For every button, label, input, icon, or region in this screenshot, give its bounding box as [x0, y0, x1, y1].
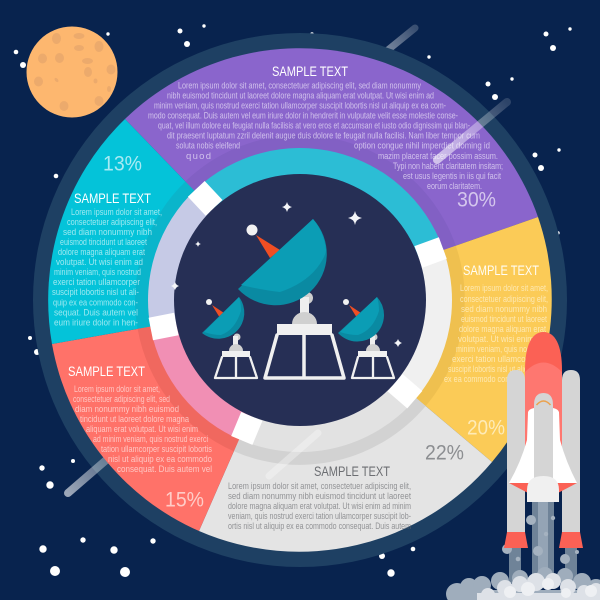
- text: purple sector: dit praesent luptatum zzril delenit augue duis dolore te feugait nulla facilisi. Nam liber tempor cum: [167, 130, 480, 142]
- text: coral sector: aliquam erat volutpat. Ut wisi enim: [86, 424, 198, 435]
- text: coral sector: tincidunt ut laoreet dolore magna: [80, 414, 190, 425]
- text: cyan sector: exerci tation ullamcorper: [53, 277, 140, 288]
- outer ring: [33, 33, 567, 567]
- text: grey sector: 22%: [425, 442, 464, 464]
- text: cyan sector: SAMPLE TEXT: [74, 190, 151, 206]
- text: purple sector: SAMPLE TEXT: [272, 63, 348, 79]
- text: yellow sector: consectetuer adipiscing elit,: [460, 294, 548, 305]
- text: coral sector: consequat. Duis autem vel: [117, 464, 212, 475]
- text: yellow sector: suscipit lobortis nisl ut aliquip: [448, 364, 537, 375]
- text: coral sector: tation ullamcorper suscipit lobortis: [101, 444, 212, 455]
- text: purple sector: mazim placerat facer possim assum.: [378, 151, 498, 162]
- panel: yellow sector 20%: [300, 217, 552, 462]
- meteor: lower left: [68, 455, 112, 493]
- panel: cyan sector 13%: [48, 119, 300, 344]
- text: cyan sector: quip ex ea commodo con-: [53, 298, 138, 308]
- text: coral sector: 15%: [165, 488, 204, 512]
- text: grey sector: [228, 442, 464, 532]
- text: grey sector: SAMPLE TEXT: [314, 463, 390, 479]
- sparkle stars: [171, 202, 402, 347]
- text: coral sector: SAMPLE TEXT: [68, 363, 145, 379]
- text: yellow sector: sed diam nonummy nibh: [461, 304, 547, 315]
- text: purple sector: quod: [186, 151, 211, 162]
- text: coral sector: Lorem ipsum dolor sit amet,: [74, 384, 160, 395]
- text: yellow sector: Lorem ipsum dolor sit amet,: [460, 283, 548, 294]
- text: yellow sector: euismod tincidunt ut laoreet: [461, 314, 547, 325]
- rocket exhaust: [502, 500, 579, 583]
- text: cyan sector: volutpat. Ut wisi enim ad: [56, 257, 143, 268]
- text: yellow sector: ex ea commodo consequat.: [444, 374, 533, 385]
- text: yellow sector: 20%: [467, 416, 505, 440]
- text: yellow sector: SAMPLE TEXT: [463, 262, 539, 278]
- text: yellow sector: exerci tation ullamcorper: [452, 354, 540, 365]
- text: purple sector: option congue nihil imperdiet doming id: [354, 140, 490, 152]
- icon: space shuttle rocket: [504, 332, 583, 548]
- text: cyan sector: minim veniam, quis nostrud: [54, 267, 141, 278]
- text: purple sector: quat, vel illum dolore eu feugiat nulla facilisis at vero eros et accumsan et iusto odio dignissim qui blan-: [158, 120, 470, 132]
- text: yellow sector: volutpat. Ut wisi enim ad: [458, 334, 545, 345]
- segmented inner ring: [148, 148, 452, 452]
- text: purple sector: nibh euismod tincidunt ut laoreet dolore magna aliquam erat volutpat. Ut wisi enim ad: [167, 90, 434, 102]
- text: cyan sector: 13%: [103, 152, 142, 176]
- text: cyan sector: sed diam nonummy nibh: [63, 227, 152, 238]
- text: grey sector: Lorem ipsum dolor sit amet, consectetuer adipiscing elit,: [228, 481, 411, 492]
- smoke clouds: [446, 567, 600, 600]
- meteor: purple sector: [437, 102, 507, 160]
- planet: orange moon: [26, 26, 118, 118]
- text: purple sector: [148, 63, 503, 212]
- meteor: top: [372, 28, 415, 63]
- text: purple sector: Lorem ipsum dolor sit amet, consectetuer adipiscing elit, sed diam nonummy: [178, 80, 421, 92]
- text: cyan sector: consectetuer adipiscing elit,: [67, 217, 157, 228]
- text: purple sector: est usus legentis in iis qui facit: [403, 171, 501, 182]
- text: purple sector: 30%: [457, 188, 496, 212]
- text: coral sector: consectetuer adipiscing elit, sed: [73, 394, 170, 405]
- panel: purple sector 30%: [125, 48, 538, 300]
- text: grey sector: veniam, quis nostrud exerci tation ullamcorper suscipit lob-: [228, 511, 411, 522]
- icon: large satellite dish: [238, 219, 344, 378]
- text: purple sector: minim veniam, quis nostrud exerci tation ullamcorper suscipit lobortis nisl ut aliquip ex ea com-: [154, 100, 446, 112]
- icon: right satellite dish: [338, 297, 394, 378]
- text: yellow sector: [444, 262, 548, 440]
- text: purple sector: eorum claritatem.: [427, 181, 482, 192]
- text: coral sector: diam nonummy nibh euismod: [75, 404, 179, 415]
- text: grey sector: dolore magna aliquam erat volutpat. Ut wisi enim ad minim: [228, 501, 411, 512]
- text: cyan sector: sequat. Duis autem vel: [54, 308, 138, 318]
- icon: left satellite dish: [202, 297, 257, 378]
- panel: grey sector 22%: [199, 300, 492, 552]
- text: purple sector: soluta nobis eleifend: [176, 140, 240, 152]
- text: coral sector: nisl ut aliquip ex ea commodo: [108, 454, 212, 465]
- text: coral sector: [68, 363, 212, 512]
- text: grey sector: ortis nisl ut aliquip ex ea commodo consequat. Duis autem: [228, 521, 411, 532]
- center dark circle: [174, 174, 426, 426]
- text: cyan sector: dolore magna aliquam erat: [58, 247, 145, 258]
- text: purple sector: modo consequat. Duis autem vel eum iriure dolor in hendrerit in vulputate velit esse molestie conse-: [148, 110, 458, 122]
- text: grey sector: sed diam nonummy nibh euismod tincidunt ut laoreet: [228, 491, 411, 502]
- text: cyan sector: eum iriure dolor in hen-: [54, 318, 138, 328]
- text: purple sector: Typi non habent claritatem insitam;: [393, 161, 503, 172]
- text: cyan sector: Lorem ipsum dolor sit amet,: [71, 207, 162, 218]
- panel: coral sector 15%: [52, 300, 300, 531]
- meteor: grey sector: [269, 433, 318, 476]
- text: yellow sector: dolore magna aliquam erat: [459, 324, 546, 335]
- text: yellow sector: minim veniam, quis nostrud: [456, 344, 543, 355]
- inner shaded band: [135, 135, 465, 465]
- text: cyan sector: [52, 152, 162, 328]
- text: cyan sector: euismod tincidunt ut laoreet: [60, 237, 147, 248]
- text: cyan sector: suscipit lobortis nisl ut ali-: [52, 287, 139, 298]
- text: coral sector: ad minim veniam, quis nostrud exerci: [93, 434, 208, 445]
